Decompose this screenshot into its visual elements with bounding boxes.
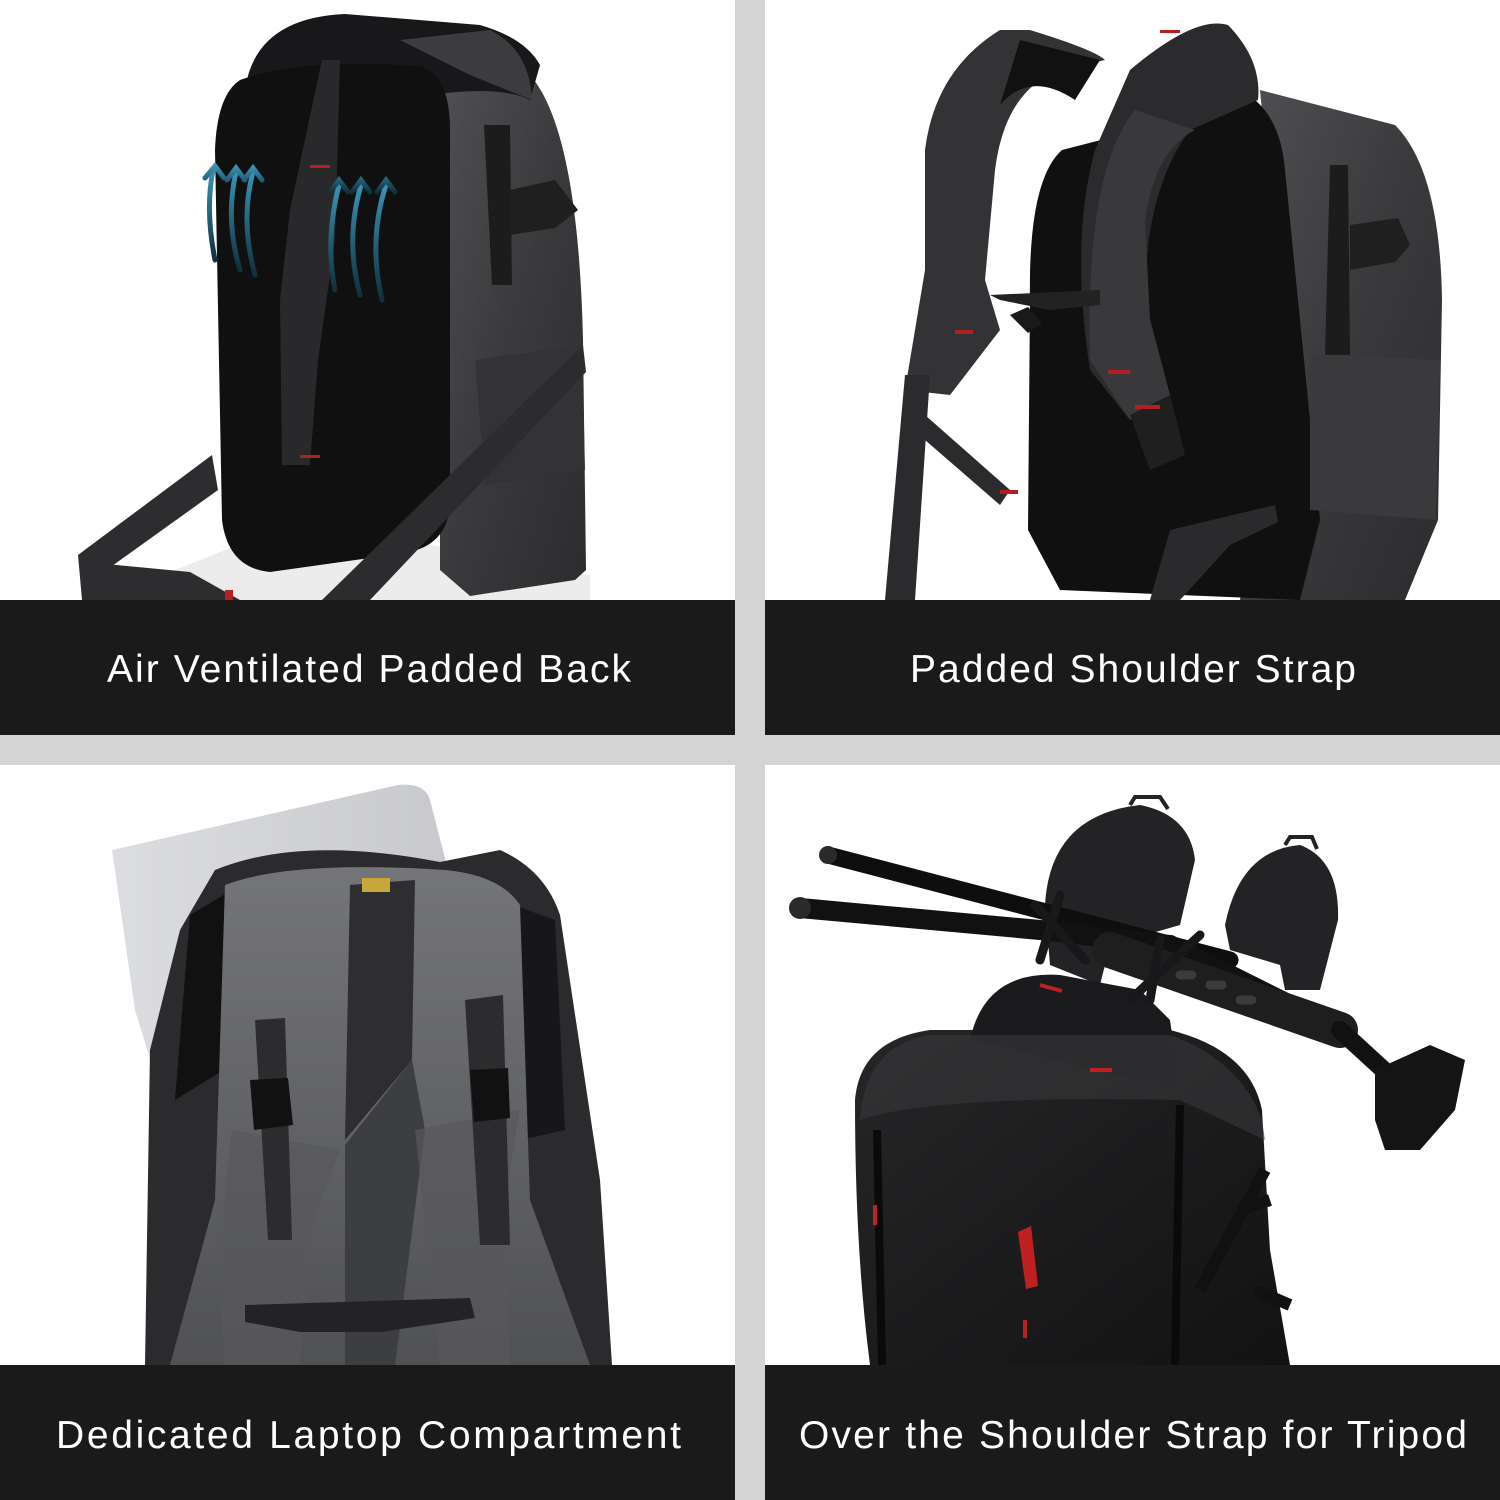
backpack: shoulder pads behind tripod bbox=[1045, 797, 1338, 990]
icon: airflow arrows bbox=[205, 166, 395, 300]
panel: air ventilated padded back bbox=[0, 0, 735, 735]
caption bar bbox=[765, 1365, 1500, 1500]
caption bar bbox=[765, 600, 1500, 735]
camera head bbox=[1375, 1045, 1465, 1150]
laptop bbox=[112, 785, 448, 1065]
tripod bbox=[789, 846, 1400, 1085]
backpack: shoulder straps view bbox=[885, 23, 1442, 600]
backpack: gray harness view bbox=[145, 850, 612, 1365]
backpack: rear view with ventilated back bbox=[78, 14, 590, 600]
caption: Padded Shoulder Strap bbox=[910, 648, 1356, 691]
panel: padded shoulder strap bbox=[765, 0, 1500, 735]
panel: dedicated laptop compartment bbox=[0, 765, 735, 1500]
caption bar bbox=[0, 1365, 735, 1500]
panel: tripod strap bbox=[765, 765, 1500, 1500]
backpack: black main body bbox=[855, 975, 1290, 1365]
caption bar bbox=[0, 600, 735, 735]
caption: Dedicated Laptop Compartment bbox=[56, 1414, 681, 1457]
caption: Over the Shoulder Strap for Tripod bbox=[799, 1414, 1467, 1457]
caption: Air Ventilated Padded Back bbox=[107, 648, 632, 691]
